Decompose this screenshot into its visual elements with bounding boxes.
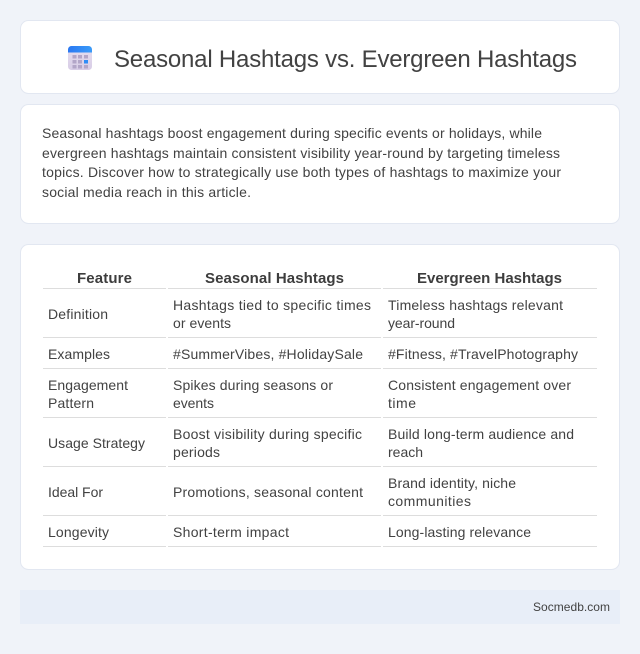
row: ideal for — [48, 475, 516, 509]
row: definition: Hashtags tied to specific times — [173, 297, 371, 313]
row: engagement pattern: Spikes during seasons or — [173, 377, 333, 393]
row: definition: Definition — [48, 306, 108, 322]
row: longevity: Short-term impact — [173, 524, 289, 540]
row: definition: year-round — [388, 315, 455, 331]
row: ideal for: Promotions, seasonal content — [173, 484, 363, 500]
row: ideal for: Ideal For — [48, 484, 103, 500]
row: usage strategy — [48, 426, 574, 460]
panel: introduction — [20, 104, 620, 224]
row: engagement pattern — [48, 377, 571, 411]
panel: comparison table — [20, 244, 620, 570]
row: examples: #SummerVibes, #HolidaySale — [173, 346, 363, 362]
row: engagement pattern: Consistent engagement over — [388, 377, 571, 393]
icon: calendar — [68, 46, 92, 70]
table header: Feature — [77, 270, 132, 287]
intro text: evergreen hashtags maintain consistent visibility year-round by targeting timeless — [42, 145, 560, 161]
intro text: topics. Discover how to strategically use both types of hashtags to maximize your — [42, 164, 561, 180]
row: usage strategy: Usage Strategy — [48, 435, 145, 451]
intro text: Seasonal hashtags boost engagement during specific events or holidays, while — [42, 125, 542, 141]
row: definition: Timeless hashtags relevant — [388, 297, 563, 313]
table header: Seasonal Hashtags — [205, 270, 344, 287]
table header: Evergreen Hashtags — [417, 270, 562, 287]
intro text — [42, 125, 561, 200]
row: examples: #Fitness, #TravelPhotography — [388, 346, 578, 362]
row: examples — [48, 346, 578, 362]
row: definition: or events — [173, 315, 231, 331]
row: engagement pattern: Pattern — [48, 395, 94, 411]
row: usage strategy: periods — [173, 444, 220, 460]
row: ideal for: communities — [388, 493, 471, 509]
row: definition — [48, 297, 563, 331]
row: longevity: Long-lasting relevance — [388, 524, 531, 540]
row: engagement pattern: time — [388, 395, 416, 411]
panel: title card — [20, 20, 620, 94]
row: examples: Examples — [48, 346, 110, 362]
row: engagement pattern: Engagement — [48, 377, 128, 393]
table header — [77, 270, 562, 287]
footer bar — [20, 590, 620, 624]
row: longevity — [48, 524, 531, 540]
row: engagement pattern: events — [173, 395, 214, 411]
intro text: social media reach in this article. — [42, 184, 251, 200]
row: longevity: Longevity — [48, 524, 109, 540]
title: Seasonal Hashtags vs. Evergreen Hashtags — [114, 46, 577, 73]
row: usage strategy: Boost visibility during specific — [173, 426, 362, 442]
row: usage strategy: reach — [388, 444, 423, 460]
footer text: Socmedb.com — [533, 600, 610, 614]
row: usage strategy: Build long-term audience and — [388, 426, 574, 442]
row: ideal for: Brand identity, niche — [388, 475, 516, 491]
